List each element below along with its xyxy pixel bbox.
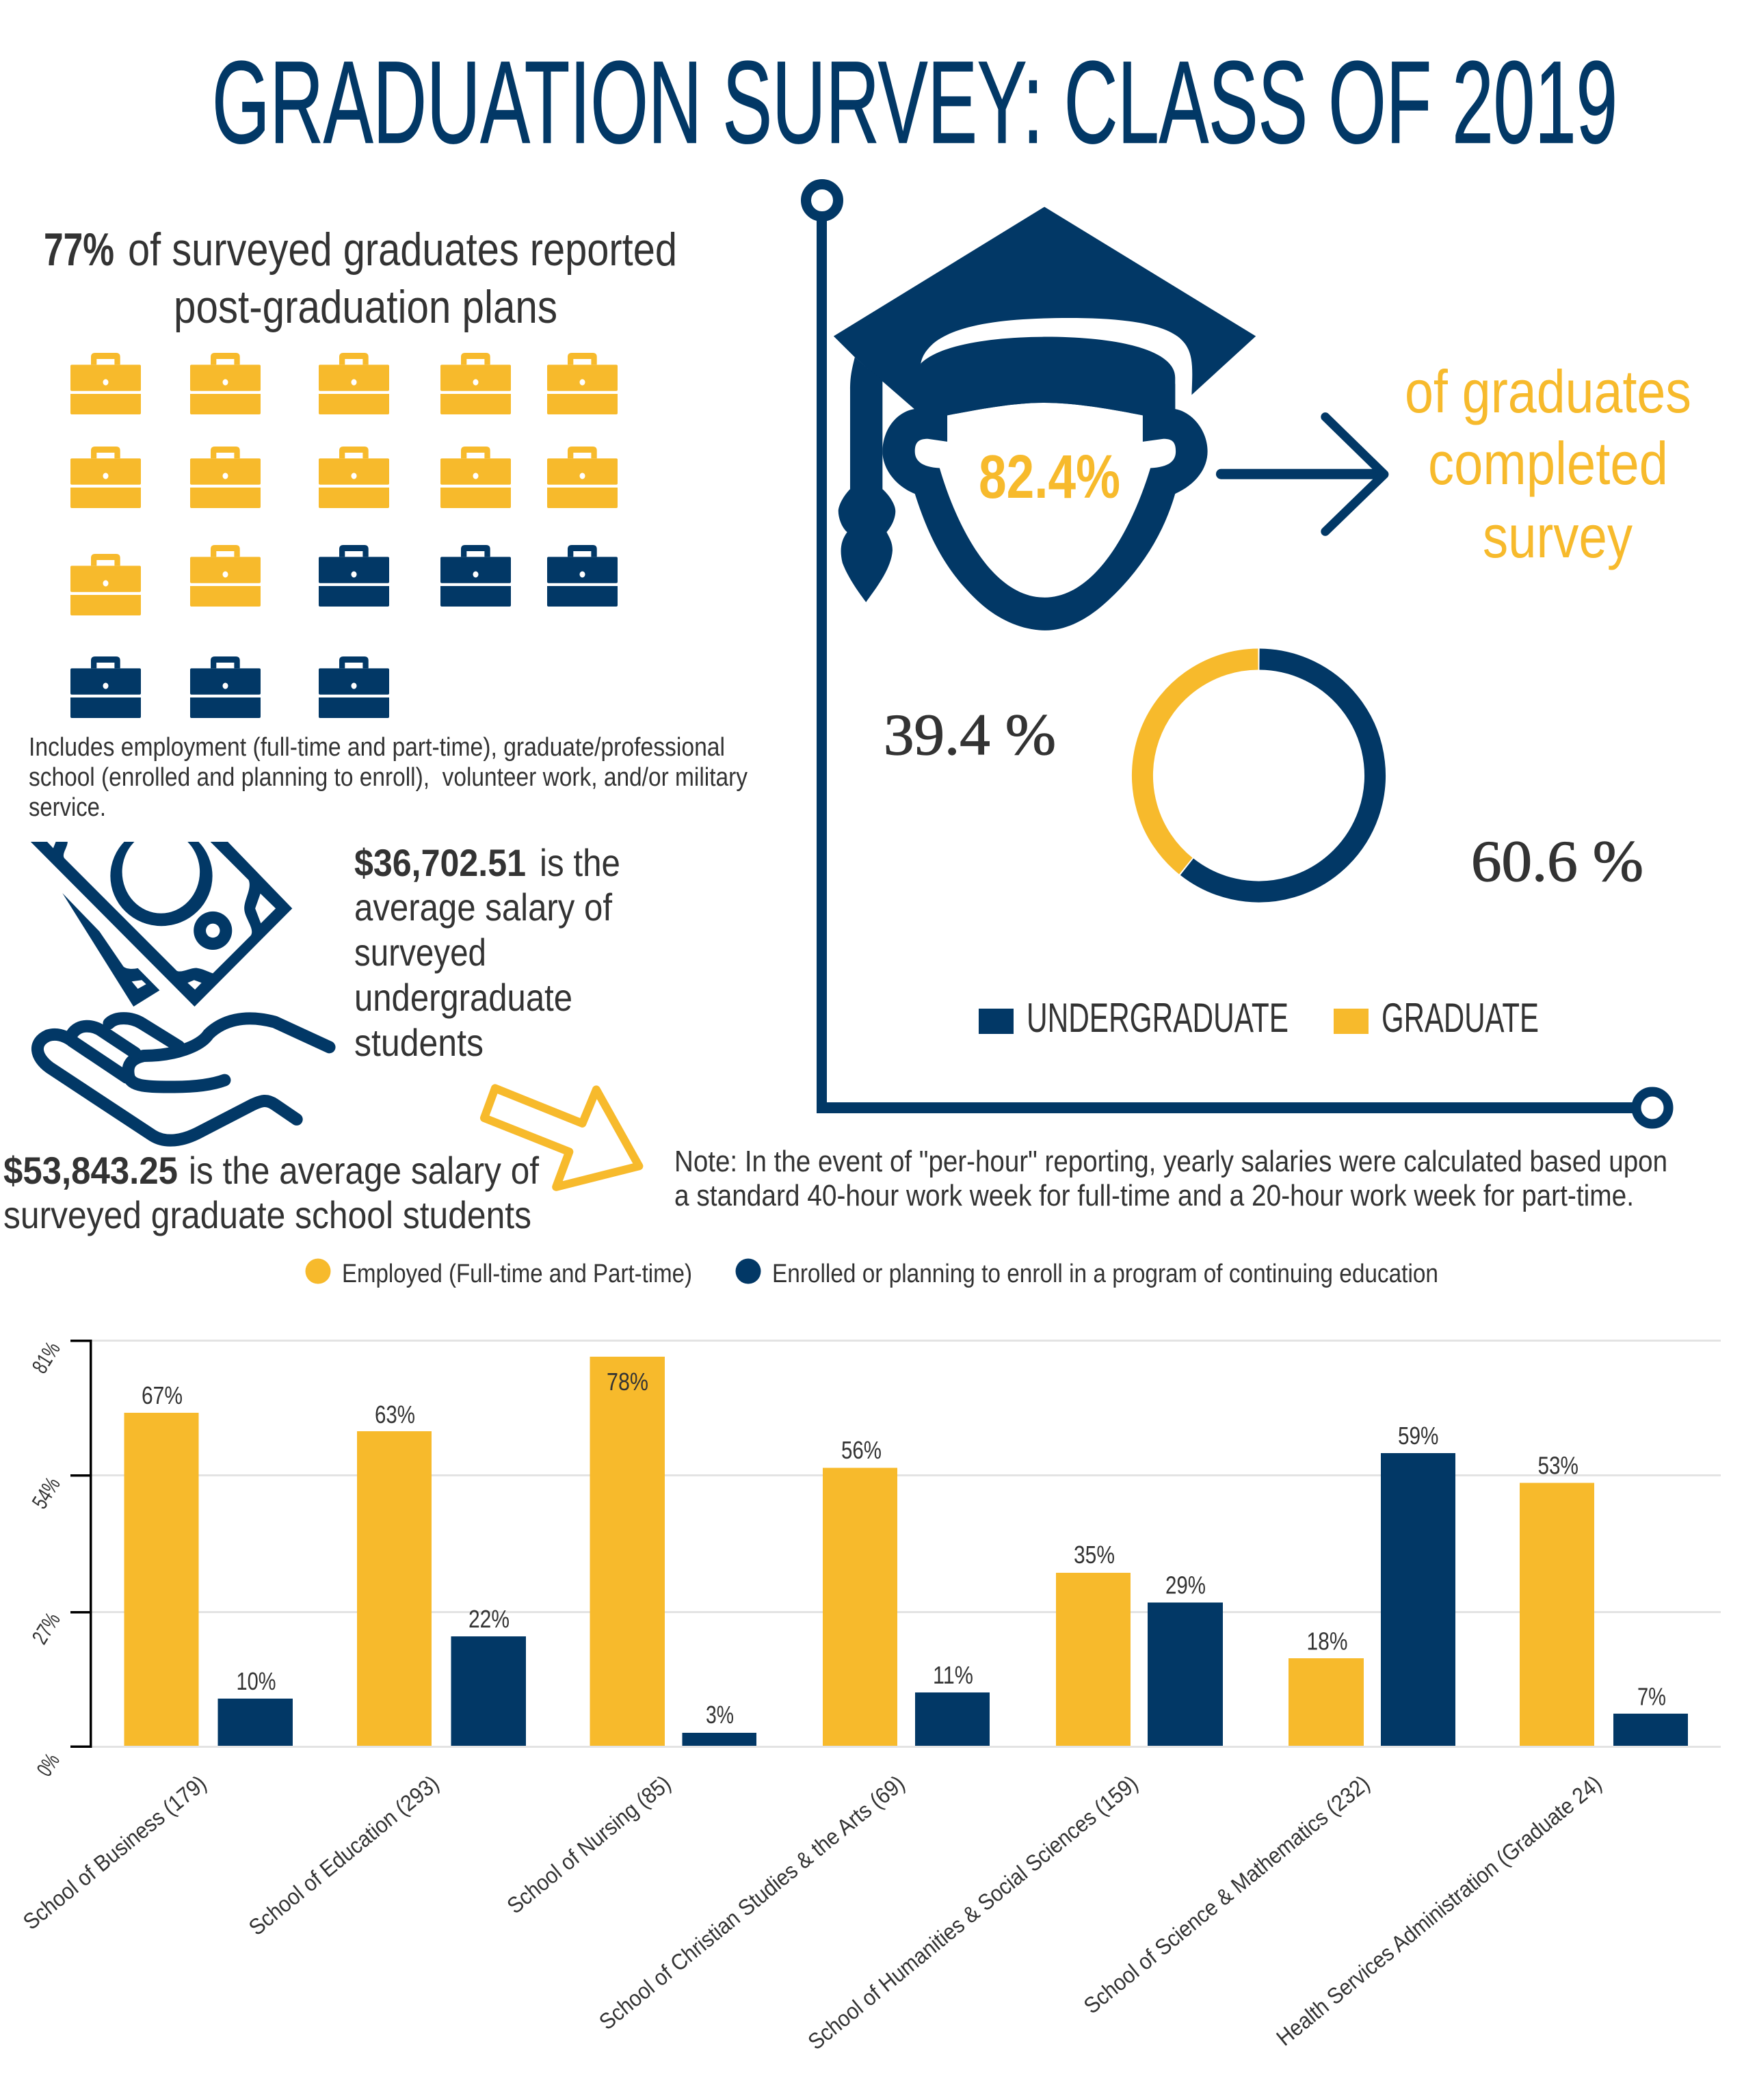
donut chart bbox=[1142, 659, 1375, 892]
text block: graduate salary: is the average salary of bbox=[189, 1149, 539, 1192]
bars: School of Education bbox=[357, 1400, 526, 1746]
heading: post-graduation plans: 77% bbox=[44, 224, 114, 276]
bars: School of Christian Studies and the Arts bbox=[823, 1436, 990, 1746]
text block: undergraduate salary bbox=[354, 841, 620, 1064]
bars: School of Humanities and Social Sciences: 35% bbox=[1074, 1541, 1115, 1569]
bars: School of Business bbox=[124, 1381, 293, 1746]
bar chart legend bbox=[305, 1258, 1438, 1288]
donut label: graduate: 39.4 % bbox=[884, 702, 1056, 767]
text block: per-hour note bbox=[674, 1145, 1667, 1212]
bars: School of Christian Studies and the Arts: 11% bbox=[933, 1661, 973, 1689]
text block: undergraduate salary: students bbox=[354, 1021, 484, 1064]
text block: undergraduate salary: average salary of bbox=[354, 886, 612, 929]
text block: includes note: service. bbox=[29, 793, 106, 822]
arrow: head to caption bbox=[1221, 417, 1384, 531]
text block: graduate salary: $53,843.25 bbox=[3, 1149, 178, 1192]
text block: undergraduate salary: is the bbox=[540, 841, 620, 884]
text block: undergraduate salary: $36,702.51 bbox=[354, 841, 526, 884]
bars: School of Christian Studies and the Arts: 56% bbox=[841, 1436, 882, 1464]
x axis category labels: School of Science & Mathematics (232) bbox=[1079, 1770, 1374, 2019]
text block: graduate salary: surveyed graduate school students bbox=[3, 1193, 531, 1236]
bars: Health Services Administration bbox=[1520, 1451, 1688, 1746]
text block: includes note: school (enrolled and planning to enroll), volunteer work, and/or military bbox=[29, 763, 748, 792]
donut legend bbox=[979, 995, 1539, 1041]
text block: per-hour note: a standard 40-hour work week for full-time and a 20-hour work week for part-time. bbox=[674, 1179, 1634, 1212]
donut label: undergraduate: 60.6 % bbox=[1471, 828, 1643, 894]
icon: graduate head with cap bbox=[834, 207, 1256, 630]
x axis category labels: Health Services Administration (Graduate 24) bbox=[1271, 1770, 1606, 2051]
y axis: 0% bbox=[31, 1749, 64, 1781]
heading: post-graduation plans bbox=[44, 224, 677, 333]
bars: School of Business: 10% bbox=[237, 1667, 276, 1695]
icon: money falling into hand bbox=[31, 826, 330, 1141]
y axis: 27% bbox=[27, 1608, 65, 1649]
bar chart legend: Enrolled or planning to enroll in a program of continuing education bbox=[772, 1260, 1438, 1288]
bars: School of Business: 67% bbox=[142, 1381, 183, 1409]
heading: post-graduation plans: post-graduation plans bbox=[174, 281, 557, 333]
text block: graduate salary bbox=[3, 1149, 539, 1236]
x axis category labels: School of Christian Studies & the Arts (69) bbox=[594, 1770, 909, 2034]
bars: School of Humanities and Social Sciences bbox=[1056, 1541, 1223, 1746]
y axis bbox=[27, 1338, 92, 1781]
bars: School of Humanities and Social Sciences: 29% bbox=[1165, 1571, 1206, 1599]
axis frame with circle ends bbox=[806, 185, 1669, 1124]
bars: School of Science and Mathematics bbox=[1289, 1422, 1455, 1746]
x axis category labels: School of Business (179) bbox=[18, 1770, 211, 1935]
caption: of graduates completed survey bbox=[1405, 358, 1691, 570]
y axis: 54% bbox=[27, 1473, 65, 1513]
bars: School of Nursing: 78% bbox=[607, 1368, 648, 1396]
arrow: yellow outline pointing to note bbox=[484, 1088, 639, 1187]
bar chart legend: Employed (Full-time and Part-time) bbox=[342, 1260, 692, 1288]
donut legend: GRADUATE bbox=[1382, 995, 1539, 1041]
text block: undergraduate salary: surveyed bbox=[354, 931, 486, 974]
icon grid: briefcases bbox=[70, 353, 618, 718]
text block: includes note: Includes employment (full-time and part-time), graduate/professional bbox=[29, 733, 725, 762]
bars: Health Services Administration: 7% bbox=[1637, 1682, 1666, 1711]
bars: School of Science and Mathematics: 59% bbox=[1398, 1422, 1439, 1450]
bars: School of Education: 63% bbox=[375, 1400, 415, 1428]
caption: of graduates completed survey: completed bbox=[1428, 429, 1668, 497]
bars: School of Science and Mathematics: 18% bbox=[1306, 1627, 1347, 1655]
donut legend: UNDERGRADUATE bbox=[1027, 995, 1289, 1041]
x axis category labels bbox=[18, 1770, 1606, 2054]
stat: 82.4%: 82.4% bbox=[979, 443, 1120, 511]
bars: School of Nursing: 3% bbox=[706, 1701, 734, 1729]
bars: School of Education: 22% bbox=[468, 1605, 510, 1633]
x axis category labels: School of Humanities & Social Sciences (159) bbox=[803, 1770, 1142, 2054]
heading: post-graduation plans: of surveyed graduates reported bbox=[128, 224, 677, 276]
bar chart bbox=[18, 1338, 1721, 2054]
x axis category labels: School of Nursing (85) bbox=[502, 1770, 675, 1919]
bars: Health Services Administration: 53% bbox=[1537, 1451, 1578, 1480]
y axis: 81% bbox=[27, 1338, 65, 1378]
bars: School of Nursing bbox=[590, 1357, 756, 1746]
caption: of graduates completed survey: of graduates bbox=[1405, 358, 1691, 425]
text block: undergraduate salary: undergraduate bbox=[354, 976, 572, 1019]
text block: includes note bbox=[29, 733, 748, 822]
caption: of graduates completed survey: survey bbox=[1483, 503, 1633, 570]
x axis category labels: School of Education (293) bbox=[243, 1770, 443, 1940]
